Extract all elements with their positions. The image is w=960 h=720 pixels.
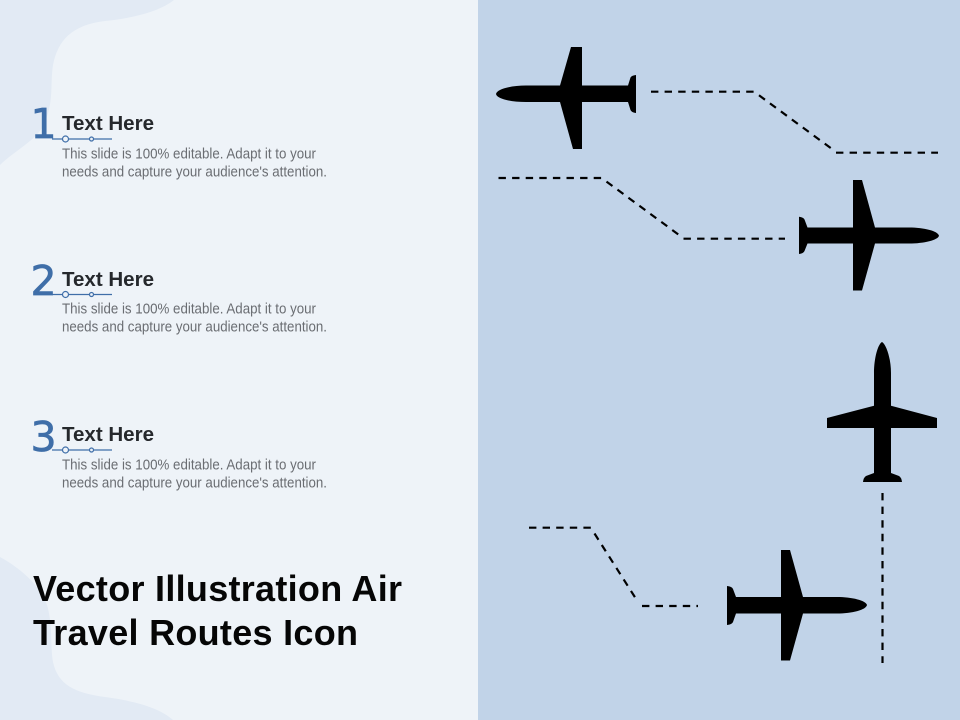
item 2 xyxy=(30,257,327,336)
connector 3 xyxy=(52,447,112,453)
body text 3 xyxy=(62,456,327,492)
plane 4 pointing right xyxy=(727,550,867,660)
connector 2 xyxy=(52,292,112,298)
body text 2: needs and capture your audience's attention. xyxy=(62,318,327,336)
body text 3: needs and capture your audience's attention. xyxy=(62,474,327,492)
title: Vector Illustration Air xyxy=(33,568,402,609)
body text 2 xyxy=(62,300,327,336)
body text 3: This slide is 100% editable. Adapt it to your xyxy=(62,456,316,474)
title: Travel Routes Icon xyxy=(33,612,358,653)
background blob: left edge wave xyxy=(0,0,174,720)
body text 2: This slide is 100% editable. Adapt it to your xyxy=(62,300,316,318)
route 3 dashed line xyxy=(529,528,698,606)
number 1: 1 xyxy=(30,100,57,148)
title xyxy=(33,568,402,653)
number 2: 2 xyxy=(30,257,57,305)
body text 1: This slide is 100% editable. Adapt it to your xyxy=(62,146,316,162)
route 2 dashed line xyxy=(498,178,785,239)
body text 1 xyxy=(62,146,327,180)
route 1 dashed line xyxy=(651,92,938,153)
heading 2: Text Here xyxy=(62,269,154,291)
body text 1: needs and capture your audience's attention. xyxy=(62,164,327,180)
right panel xyxy=(478,0,960,720)
number 3: 3 xyxy=(30,413,57,461)
plane 1 pointing left xyxy=(496,47,636,149)
heading 3: Text Here xyxy=(62,424,154,446)
item 1 xyxy=(30,100,327,180)
heading 1: Text Here xyxy=(62,113,154,135)
plane 2 pointing right xyxy=(799,180,939,290)
item 3 xyxy=(30,413,327,492)
route 4 vertical dashed line xyxy=(881,493,884,663)
plane 3 pointing up xyxy=(827,342,937,482)
connector 1 xyxy=(52,136,112,142)
